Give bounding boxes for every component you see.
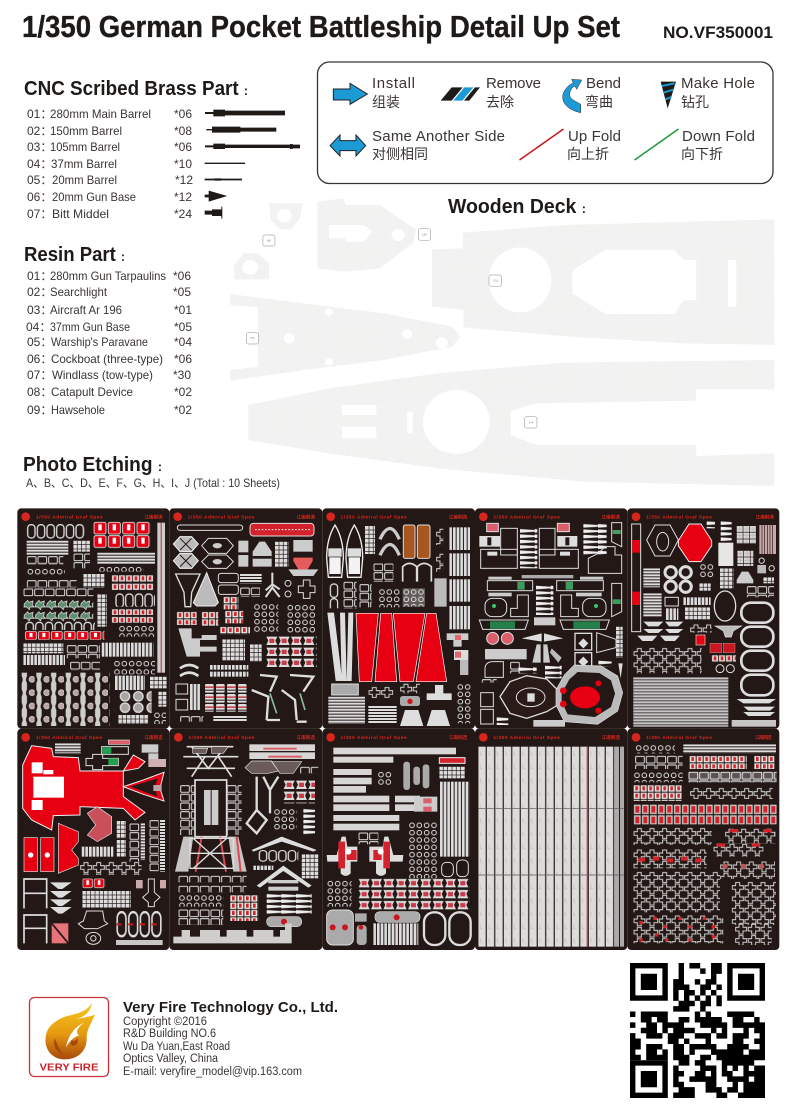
resin row 02: Searchlight <box>50 285 108 299</box>
sheet H header: 江南制造 <box>449 734 468 741</box>
sheet C header: 1/350 Admiral Graf Spee <box>341 514 407 520</box>
panel: sheet G <box>169 729 322 950</box>
sheet J header: 江南制造 <box>755 734 772 741</box>
icons: brass barrel silhouettes <box>205 110 300 219</box>
row 02: 150mm Barrel <box>50 124 122 138</box>
sheet G parts <box>173 744 318 943</box>
legend: make hole: Make Hole <box>681 75 755 92</box>
resin row 06: 06： <box>27 352 52 366</box>
resin row 01: *06 <box>173 269 191 283</box>
sheet F header: 江南制造 <box>144 734 163 741</box>
row 01 <box>27 107 192 121</box>
resin row 04: 37mm Gun Base <box>50 320 130 334</box>
resin row 07: Windlass (tow-type) <box>52 368 153 382</box>
sheet B header: 江南制造 <box>297 513 315 520</box>
deck part 4: 4 <box>267 239 273 242</box>
resin row 09: Hawsehole <box>51 403 105 417</box>
heading: Photo Etching: Photo Etching : <box>23 454 162 476</box>
deck part 2: 2 <box>493 279 499 282</box>
resin row 03 <box>27 303 192 317</box>
row 05: 05： <box>27 173 52 187</box>
sheet I header: 1/350 Admiral Graf Spee <box>493 735 560 741</box>
legend: remove <box>441 75 541 110</box>
resin row 05: *04 <box>174 335 192 349</box>
row 04: 04： <box>27 157 52 171</box>
legend: down fold <box>634 128 755 162</box>
company info: Wu Da Yuan,East Road <box>123 1041 230 1053</box>
panel: sheet I <box>475 729 627 950</box>
sheet F header <box>21 733 163 742</box>
resin row 03: Aircraft Ar 196 <box>50 303 122 317</box>
legend: make hole: 钻孔 <box>681 94 709 110</box>
legend: remove: 去除 <box>486 94 514 110</box>
logo: Very Fire <box>30 998 108 1076</box>
row 04 <box>27 157 192 171</box>
resin row 09 <box>27 403 192 417</box>
sheet G header <box>174 733 315 742</box>
heading: CNC Scribed Brass Part: CNC Scribed Brass Part : <box>24 78 248 100</box>
resin row 07: 07： <box>27 368 52 382</box>
row 01: 280mm Main Barrel <box>50 107 151 121</box>
sheet E header: 1/350 Admiral Graf Spee <box>646 514 712 520</box>
sheet F parts <box>23 740 166 945</box>
row 05: 20mm Barrel <box>52 173 117 187</box>
resin row 08: *02 <box>174 385 192 399</box>
sheet D parts <box>479 523 623 727</box>
sheet D header: 江南制造 <box>602 513 620 520</box>
legend: same another side: Same Another Side <box>372 128 505 145</box>
resin row 02 <box>27 285 191 299</box>
logo wordmark: VERY FIRE <box>40 1062 98 1074</box>
product number: NO.VF350001 <box>663 23 773 42</box>
row 03: 03： <box>27 140 52 154</box>
panel: sheet E <box>627 508 779 729</box>
deck part 1 <box>248 360 774 486</box>
resin row 01: 280mm Gun Tarpaulins <box>50 269 166 283</box>
legend: install: Install <box>372 75 415 92</box>
resin row 05: 05： <box>27 335 52 349</box>
resin row 09: 09： <box>27 403 52 417</box>
sheet J parts <box>633 744 777 945</box>
resin row 06: Cockboat (three-type) <box>51 352 163 366</box>
deck part 2 <box>432 219 774 345</box>
resin row 02: 02： <box>27 285 52 299</box>
resin row 05: Warship's Paravane <box>51 335 148 349</box>
QR code <box>630 963 765 1098</box>
panel: sheet J <box>627 729 779 950</box>
sheet H parts <box>327 748 471 945</box>
legend: up fold: Up Fold <box>568 128 621 145</box>
sheet F header: 1/350 Admiral Graf Spee <box>36 735 102 741</box>
row 02: 02： <box>27 124 52 138</box>
row 04: *10 <box>174 157 192 171</box>
legend: same another side <box>330 128 505 162</box>
panel: sheet B <box>169 508 322 729</box>
row 07: 07： <box>27 207 52 221</box>
heading: Resin Part: Resin Part : <box>24 244 125 266</box>
sheet A header <box>21 512 163 521</box>
panel: sheet H <box>322 729 475 950</box>
company info <box>123 999 338 1078</box>
row 06 <box>27 190 192 204</box>
resin row 08 <box>27 385 192 399</box>
row 06: 06： <box>27 190 52 204</box>
row 07: Bitt Middel <box>52 207 109 221</box>
resin row 08: Catapult Device <box>51 385 133 399</box>
sheet A header: 1/350 Admiral Graf Spee <box>36 514 103 520</box>
sheet E header <box>632 512 774 521</box>
panel: sheet F <box>17 729 169 950</box>
company info: E-mail: veryfire_model@vip.163.com <box>123 1066 302 1078</box>
deck part 3: 3 <box>250 337 257 340</box>
sheet A header: 江南制造 <box>144 513 163 520</box>
row 07: *24 <box>174 207 192 221</box>
legend: same another side: 对侧相同 <box>372 146 428 162</box>
row 01: 01： <box>27 107 52 121</box>
sheet G header: 1/350 Admiral Graf Spee <box>188 735 255 741</box>
row 05: *12 <box>175 173 193 187</box>
legend: up fold: 向上折 <box>567 146 609 162</box>
row 04: 37mm Barrel <box>51 157 117 171</box>
sheet B header <box>173 512 315 521</box>
row 06: *12 <box>174 190 192 204</box>
sheet D header <box>479 512 620 521</box>
legend: install <box>333 75 415 110</box>
row 03: *06 <box>174 140 192 154</box>
row 07 <box>27 207 192 221</box>
sheet F red deck <box>23 746 145 830</box>
title: 1/350 German Pocket Battleship Detail Up Set <box>22 9 620 44</box>
panel: sheet A <box>17 508 169 729</box>
legend: bend: Bend <box>586 75 621 92</box>
sheet B parts <box>173 523 318 722</box>
legend: down fold: Down Fold <box>682 128 755 145</box>
resin row 07 <box>27 368 191 382</box>
icon: flame <box>45 1003 95 1059</box>
row 01: *06 <box>174 107 192 121</box>
list: brass parts <box>27 107 193 221</box>
resin row 06: *06 <box>174 352 192 366</box>
panel: sheet D <box>475 508 627 729</box>
legend: make hole <box>661 75 755 110</box>
resin row 04: 04： <box>26 320 51 334</box>
company info: Very Fire Technology Co., Ltd. <box>123 999 338 1016</box>
sheet I header: 江南制造 <box>602 734 620 741</box>
legend: install: 组装 <box>372 94 400 110</box>
sheet J header <box>632 733 772 742</box>
company info: Optics Valley, China <box>123 1053 219 1065</box>
panel: sheet C <box>322 508 475 729</box>
resin row 05 <box>27 335 192 349</box>
list: resin parts <box>26 269 192 417</box>
resin row 03: *01 <box>174 303 192 317</box>
row 06: 20mm Gun Base <box>52 190 136 204</box>
row 03 <box>27 140 192 154</box>
sheet A parts <box>20 522 167 726</box>
row 03: 105mm Barrel <box>50 140 120 154</box>
company info: R&D Building NO.6 <box>123 1028 216 1040</box>
sheet list: A、B、C、D、E、F、G、H、I、J (Total : 10 Sheets) <box>26 476 280 490</box>
sheet B header: 1/350 Admiral Graf Spee <box>188 514 255 520</box>
resin row 04: *05 <box>174 320 192 334</box>
sheet E parts <box>632 521 776 727</box>
sheet I header <box>479 733 620 742</box>
deck part 4 <box>234 203 303 279</box>
legend: up fold <box>520 128 621 162</box>
sheet G header: 江南制造 <box>297 734 315 741</box>
resin row 03: 03： <box>27 303 52 317</box>
resin row 09: *02 <box>174 403 192 417</box>
deck part 1: 1 <box>529 421 535 424</box>
panel: wooden deck parts <box>230 198 774 486</box>
deck part 5: 5 <box>422 233 429 236</box>
sheet I strips <box>478 747 624 947</box>
legend: down fold: 向下折 <box>681 146 723 162</box>
legend: bend: 弯曲 <box>585 94 613 110</box>
sheet D header: 1/350 Admiral Graf Spee <box>493 514 560 520</box>
row 02: *08 <box>174 124 192 138</box>
row 02 <box>27 124 192 138</box>
heading: Wooden Deck: Wooden Deck : <box>448 196 586 218</box>
legend: bend <box>563 75 621 113</box>
row 05 <box>27 173 193 187</box>
resin row 04 <box>26 320 192 334</box>
company info: Copyright ©2016 <box>123 1016 207 1028</box>
sheet E header: 江南制造 <box>756 513 774 520</box>
sheet C header <box>326 512 468 521</box>
resin row 01: 01： <box>27 269 52 283</box>
legend: remove: Remove <box>486 75 541 92</box>
deck part 5 <box>317 198 430 272</box>
resin row 02: *05 <box>173 285 191 299</box>
sheet C right half <box>400 525 471 726</box>
panel: symbol legend <box>318 62 773 184</box>
sheet C header: 江南制造 <box>449 513 468 520</box>
sheet C parts <box>327 525 471 726</box>
resin row 07: *30 <box>173 368 191 382</box>
sheet H header: 1/350 Admiral Graf Spee <box>341 735 407 741</box>
deck part 3 <box>230 294 460 381</box>
sheet H header <box>326 733 468 742</box>
resin row 08: 08： <box>27 385 52 399</box>
sheet J header: 1/350 Admiral Graf Spee <box>646 735 712 741</box>
